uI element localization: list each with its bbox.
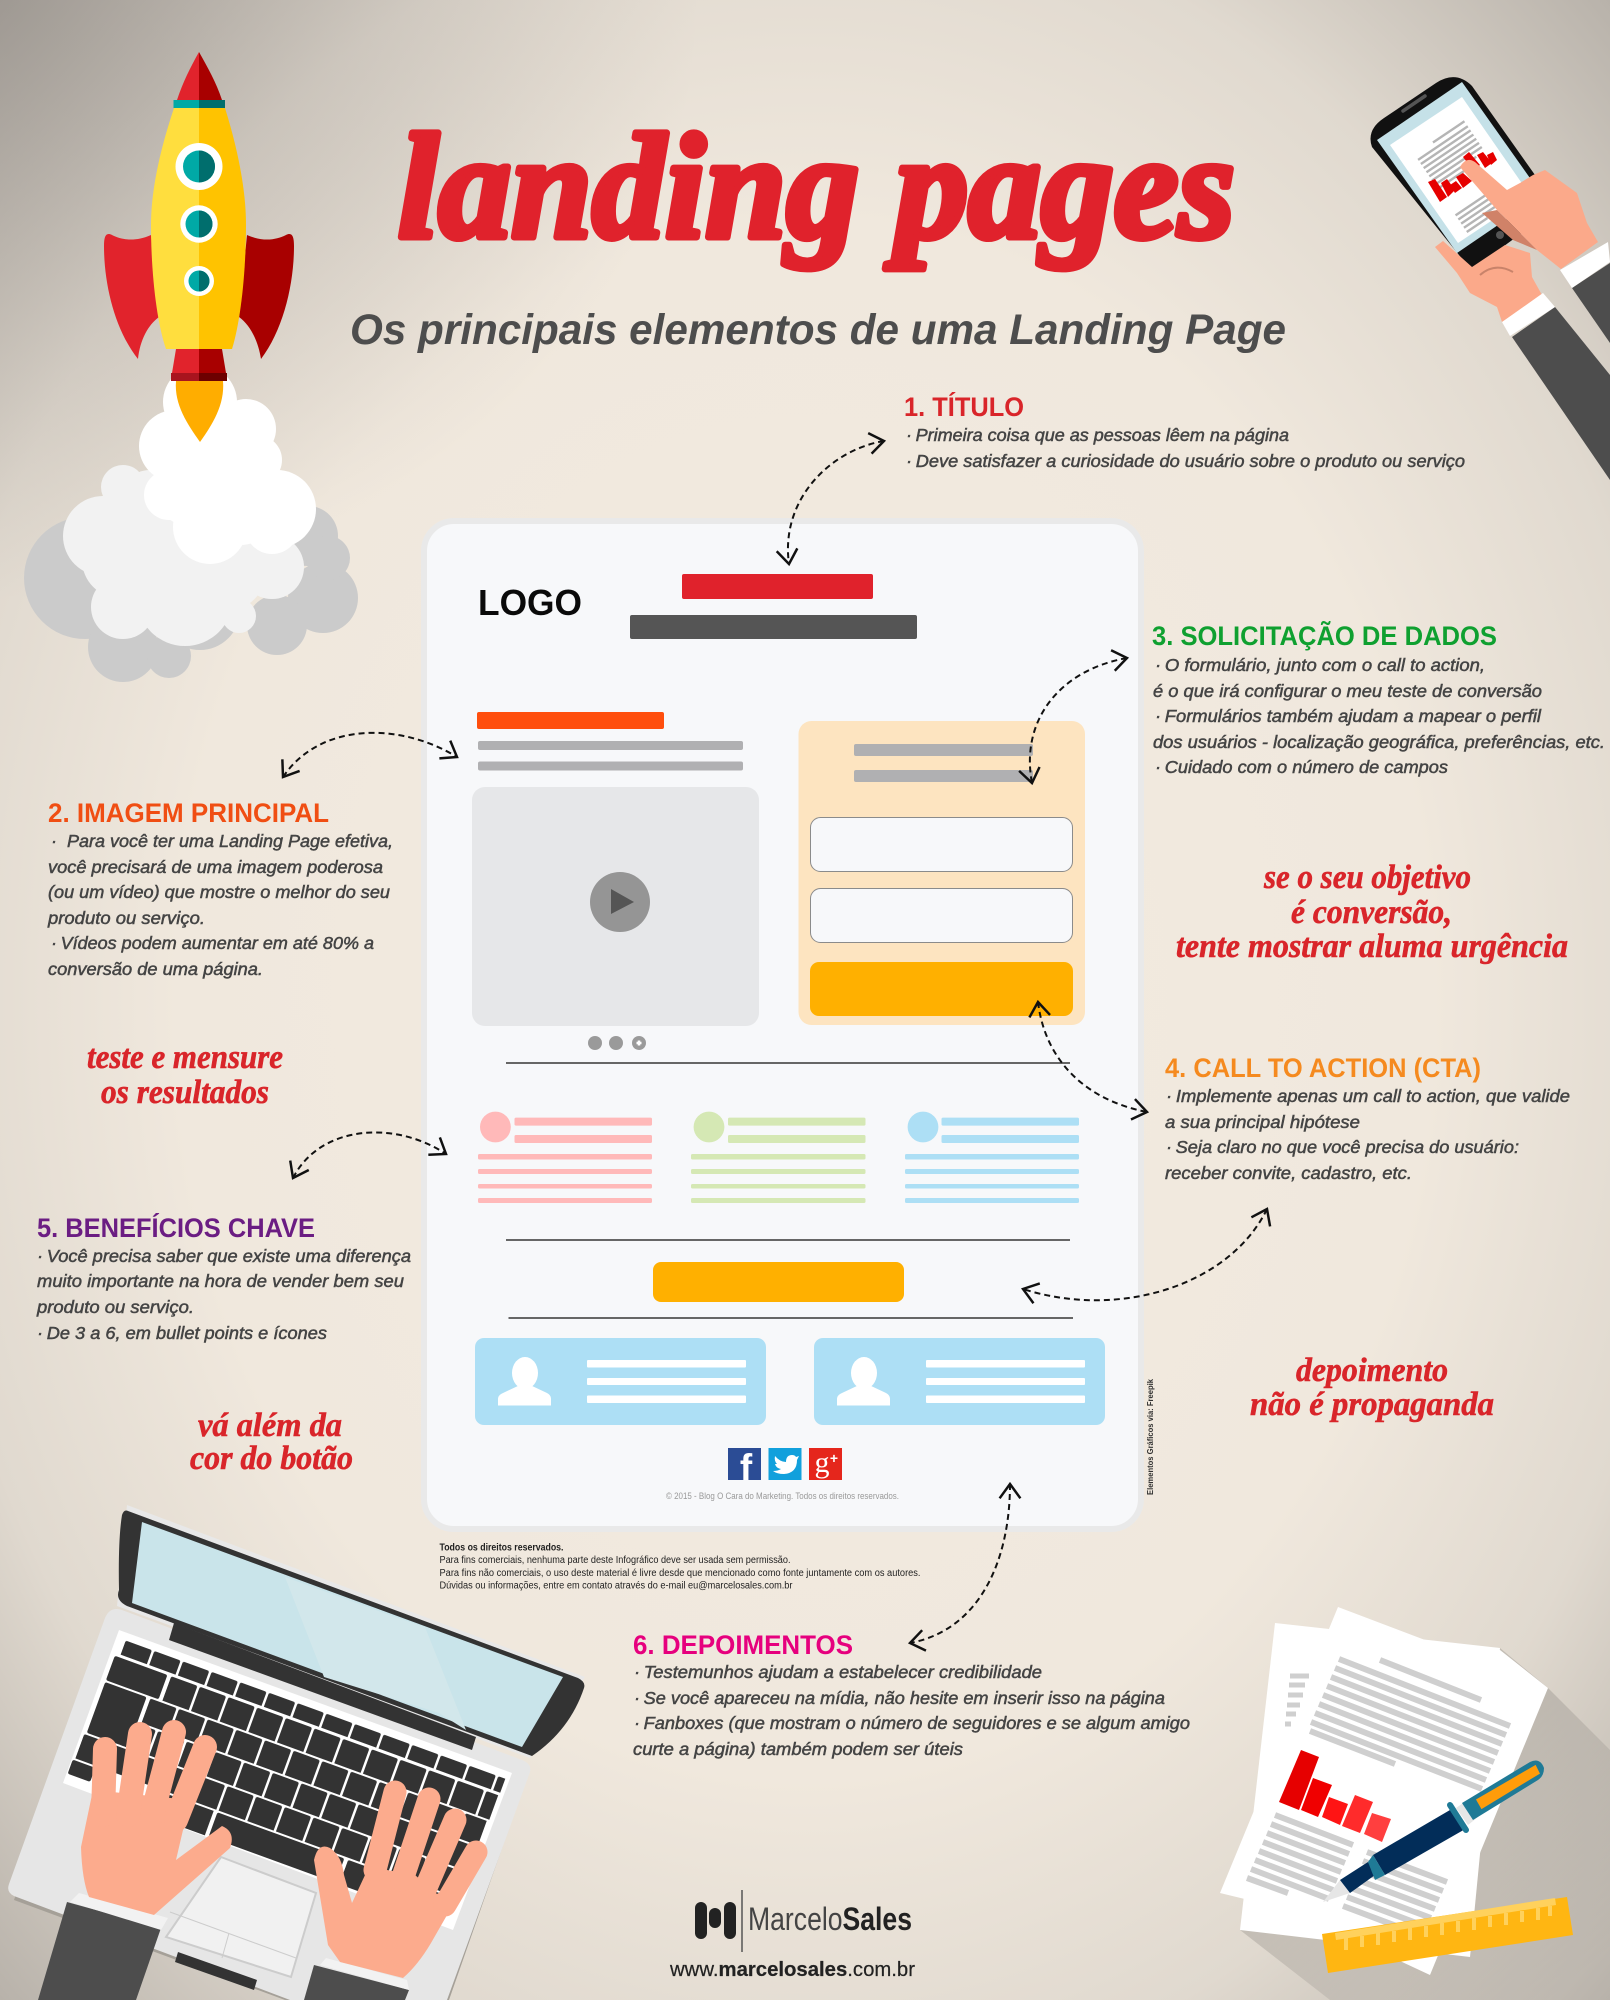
- subtitle: Os principais elementos de uma Landing Page: [350, 306, 1286, 354]
- logo divider: [741, 1890, 743, 1952]
- section 2: imagem principal: você precisará de uma imagem poderosa: [48, 857, 383, 877]
- left sleeve: [38, 1902, 161, 2000]
- icon: papers, pen and ruler: [1220, 1607, 1610, 2000]
- smoke: light cloud: [63, 465, 304, 646]
- quote: urgencia: [1176, 859, 1568, 965]
- benefit column: pink: [478, 1112, 652, 1203]
- icon: laptop with typing hands: [8, 1505, 585, 2000]
- second call to action button: [653, 1262, 904, 1302]
- section 4: call to action: a sua principal hipótese: [1165, 1112, 1360, 1132]
- section 2: imagem principal: · Para você ter uma Landing Page efetiva,: [51, 831, 393, 851]
- section 4: call to action: · Seja claro no que você precisa do usuário:: [1166, 1137, 1519, 1157]
- section 4: call to action: 4. CALL TO ACTION (CTA): [1165, 1053, 1481, 1083]
- rocket fins: [104, 234, 159, 359]
- left hand fingers: [103, 1732, 205, 1820]
- section 3: solicitacao de dados: [1152, 620, 1605, 777]
- arrow: imagem principal: [283, 733, 457, 777]
- smoke: grey back cloud: [24, 506, 358, 682]
- legal notice: Para fins não comerciais, o uso deste material é livre desde que mencionado como fonte juntamente com os autores.: [440, 1568, 920, 1579]
- laptop base shadow: [14, 1616, 530, 2000]
- thumb shade: [1482, 210, 1537, 250]
- document lines lower right: [1343, 1852, 1447, 1936]
- icon: google plus: g: [814, 1446, 830, 1479]
- back paper: [1240, 1623, 1500, 1957]
- left hand palm: [81, 1790, 232, 1915]
- panel: landing page mockup: [424, 521, 1141, 1529]
- right sleeve: [1572, 263, 1610, 343]
- benefit column: blue: [905, 1112, 1079, 1203]
- icon: rocket with smoke: [24, 52, 358, 682]
- rocket flame: [176, 381, 223, 442]
- icon: twitter: [768, 1448, 802, 1480]
- right sleeve: [304, 1965, 409, 2000]
- arrow: second cta: [1023, 1209, 1267, 1300]
- right cuff: [1560, 242, 1610, 288]
- phone screen: [1377, 82, 1542, 253]
- rocket windows: [176, 143, 222, 296]
- legal notice: Todos os direitos reservados.: [440, 1542, 564, 1554]
- section 3: solicitacao de dados: · Cuidado com o número de campos: [1155, 757, 1448, 777]
- card background: [424, 521, 1141, 1529]
- document lines upper: [1310, 1659, 1510, 1789]
- quote: depoimento: depoimento: [1296, 1352, 1448, 1389]
- section 6: depoimentos: · Fanboxes (que mostram o número de seguidores e se algum amigo: [634, 1713, 1190, 1733]
- laptop notch: [175, 1952, 257, 1990]
- section 3: solicitacao de dados: · Formulários também ajudam a mapear o perfil: [1155, 706, 1542, 726]
- phone body: [1370, 77, 1556, 268]
- rocket engine: [172, 349, 199, 373]
- ruler: [1322, 1897, 1573, 1973]
- main image heading bars: [477, 712, 743, 770]
- legal notice: Dúvidas ou informações, entre em contato através do e-mail eu@marcelosales.com.br: [440, 1580, 793, 1592]
- section 4: call to action: [1165, 1053, 1570, 1183]
- benefit column: green: [691, 1112, 866, 1203]
- rocket nose: [177, 52, 199, 100]
- logo icon: [695, 1902, 736, 1939]
- arrow: beneficios: [293, 1132, 446, 1178]
- section 5: beneficios chave: 5. BENEFÍCIOS CHAVE: [37, 1212, 315, 1243]
- laptop hinge: [169, 1623, 476, 1750]
- quote: urgencia: é conversão,: [1291, 894, 1452, 931]
- document bar chart: [1279, 1750, 1391, 1842]
- page bar chart: [1428, 152, 1497, 202]
- arrow: depoimentos: [910, 1484, 1010, 1643]
- copyright line: © 2015 - Blog O Cara do Marketing. Todos os direitos reservados.: [666, 1491, 899, 1501]
- rocket body: [151, 108, 199, 349]
- section 2: imagem principal: (ou um vídeo) que mostre o melhor do seu: [48, 882, 390, 902]
- section 5: beneficios chave: [36, 1212, 411, 1343]
- arrow: call to action: [1038, 1002, 1147, 1112]
- pen: [1323, 1760, 1544, 1902]
- icon: google plus: +: [830, 1450, 838, 1466]
- long shadow: [1240, 1648, 1610, 2000]
- quote: botao: vá além da: [198, 1407, 342, 1444]
- section 4: call to action: receber convite, cadastro, etc.: [1165, 1163, 1412, 1183]
- legal notice: [440, 1542, 920, 1592]
- logo wordmark: MarceloSales: [748, 1901, 912, 1937]
- section 2: imagem principal: conversão de uma página.: [48, 959, 263, 979]
- laptop lid rim: [117, 1505, 585, 1758]
- testimonial card 1: [475, 1338, 766, 1425]
- arrow: solicitacao de dados: [1030, 658, 1127, 783]
- divider rules: [506, 1063, 1073, 1318]
- legal notice: Para fins comerciais, nenhuma parte deste Infográfico deve ser usada sem permissão.: [440, 1555, 790, 1566]
- quote: teste e mensure: os resultados: [101, 1074, 269, 1111]
- left sleeve: [1512, 307, 1610, 480]
- left hand crease: [1480, 268, 1513, 275]
- right hand: [1460, 160, 1598, 269]
- right hand fingers: [375, 1792, 476, 1905]
- subheadline bar: [630, 615, 917, 639]
- laptop screen: [132, 1522, 563, 1747]
- website: www.marcelosales.com.br: [669, 1959, 915, 1981]
- quote: depoimento: [1250, 1352, 1494, 1423]
- quote: urgencia: tente mostrar aluma urgência: [1176, 928, 1568, 965]
- quote: botao: [190, 1407, 353, 1477]
- section 5: beneficios chave: · De 3 a 6, em bullet points e ícones: [37, 1323, 327, 1343]
- quote: teste e mensure: teste e mensure: [87, 1039, 283, 1076]
- right hand palm: [314, 1846, 470, 1978]
- section 2: imagem principal: · Vídeos podem aumentar em até 80% a: [51, 933, 374, 953]
- page text lines: [1415, 121, 1516, 232]
- form panel: [798, 721, 1085, 1025]
- right hand: [314, 1792, 476, 1978]
- section 5: beneficios chave: · Você precisa saber que existe uma diferença: [37, 1246, 411, 1266]
- icon: smartphone held by hands: [1370, 77, 1610, 480]
- section 5: beneficios chave: muito importante na hora de vender bem seu: [37, 1271, 404, 1291]
- section 3: solicitacao de dados: é o que irá configurar o meu teste de conversão: [1153, 681, 1542, 701]
- section 6: depoimentos: curte a página) também podem ser úteis: [633, 1739, 963, 1759]
- section 4: call to action: · Implemente apenas um call to action, que valide: [1166, 1086, 1570, 1106]
- section 6: depoimentos: 6. DEPOIMENTOS: [633, 1630, 853, 1660]
- carousel dots: [588, 1036, 646, 1050]
- left cuff: [70, 1893, 168, 1930]
- section 1: titulo: [904, 391, 1465, 471]
- smoke: white cloud: [139, 365, 316, 564]
- title: landing pages: [398, 104, 1235, 270]
- section 3: solicitacao de dados: dos usuários - localização geográfica, preferências, etc.: [1153, 732, 1605, 752]
- document lines lower left: [1247, 1815, 1353, 1899]
- section 1: titulo: 1. TÍTULO: [904, 391, 1024, 422]
- video placeholder: [472, 787, 759, 1026]
- section 1: titulo: · Primeira coisa que as pessoas lêem na página: [906, 425, 1289, 445]
- laptop bezel: [118, 1510, 584, 1756]
- testimonial card 2: [814, 1338, 1105, 1425]
- section 5: beneficios chave: produto ou serviço.: [36, 1297, 194, 1317]
- keyboard keys: [64, 1637, 505, 1925]
- left hand: [1435, 241, 1542, 322]
- icon: facebook: f: [740, 1447, 753, 1488]
- phone home button: [1496, 231, 1504, 239]
- headline bar: [682, 574, 873, 599]
- section 6: depoimentos: · Testemunhos ajudam a estabelecer credibilidade: [634, 1662, 1042, 1682]
- section 6: depoimentos: · Se você apareceu na mídia, não hesite em inserir isso na página: [634, 1688, 1165, 1708]
- quote: botao: cor do botão: [190, 1440, 353, 1477]
- quote: urgencia: se o seu objetivo: [1263, 859, 1471, 896]
- icon: google plus: [809, 1446, 842, 1480]
- laptop base: [8, 1609, 530, 2000]
- screen reflections: [285, 1577, 466, 1730]
- section 2: imagem principal: produto ou serviço.: [47, 908, 205, 928]
- section 2: imagem principal: [47, 798, 393, 979]
- keyboard well: [63, 1630, 512, 1930]
- section 3: solicitacao de dados: 3. SOLICITAÇÃO DE DADOS: [1152, 620, 1497, 651]
- icon: facebook: [728, 1447, 761, 1488]
- right cuff: [320, 1958, 409, 1990]
- section 6: depoimentos: [633, 1630, 1190, 1759]
- quote: depoimento: não é propaganda: [1250, 1386, 1494, 1423]
- top paper: [1220, 1607, 1548, 1975]
- section 2: imagem principal: 2. IMAGEM PRINCIPAL: [48, 798, 329, 828]
- trackpad: [166, 1857, 316, 1977]
- phone page: [1390, 97, 1530, 243]
- trackpad lines: [170, 1912, 296, 1958]
- footer logo: [695, 1890, 912, 1952]
- arrow: titulo: [788, 441, 884, 564]
- back paper lines: [1285, 1676, 1309, 1724]
- quote: teste e mensure: [87, 1039, 283, 1111]
- logo text: LOGO: [478, 582, 582, 623]
- left hand: [81, 1732, 232, 1915]
- phone speaker: [1403, 96, 1425, 111]
- section 1: titulo: · Deve satisfazer a curiosidade do usuário sobre o produto ou serviço: [906, 451, 1465, 471]
- section 3: solicitacao de dados: · O formulário, junto com o call to action,: [1155, 655, 1485, 675]
- left cuff: [1502, 293, 1555, 336]
- graphics credit: Elementos Gráficos via: Freepik: [1146, 1378, 1155, 1495]
